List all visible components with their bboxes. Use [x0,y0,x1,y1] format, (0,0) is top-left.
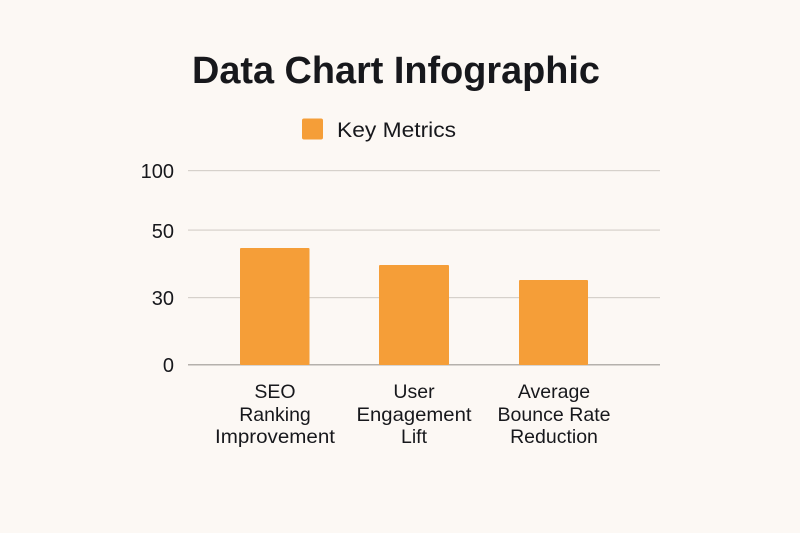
legend swatch [302,118,323,140]
x-axis label: Average Bounce Rate Reduction [498,381,610,448]
x-axis label: SEO Ranking Improvement: Improvement [215,426,336,448]
y-axis labels [141,161,174,377]
y-axis labels: 0 [163,355,174,377]
bar: Average Bounce Rate Reduction [519,280,588,365]
x-axis label: User Engagement Lift: User [393,381,435,403]
x-axis label: User Engagement Lift: Engagement [356,404,472,426]
x-axis label: Average Bounce Rate Reduction: Bounce Rate [498,404,610,426]
x-axis label: SEO Ranking Improvement [215,381,336,448]
x-axis label: Average Bounce Rate Reduction: Reduction [510,426,598,448]
legend label: Key Metrics [337,119,456,142]
x-axis label: Average Bounce Rate Reduction: Average [518,381,590,403]
x-axis label: User Engagement Lift [356,381,472,448]
x-axis label: SEO Ranking Improvement: SEO [254,381,296,403]
bar: User Engagement Lift [379,265,449,365]
x-axis label: SEO Ranking Improvement: Ranking [239,404,311,426]
y-axis labels: 50 [152,221,174,243]
y-axis labels: 30 [152,288,174,310]
bar: SEO Ranking Improvement [240,248,310,365]
x-axis label: User Engagement Lift: Lift [401,426,428,448]
legend [302,118,456,142]
title: Data Chart Infographic [192,50,600,92]
y-axis labels: 100 [141,161,174,183]
bar chart [141,161,660,448]
